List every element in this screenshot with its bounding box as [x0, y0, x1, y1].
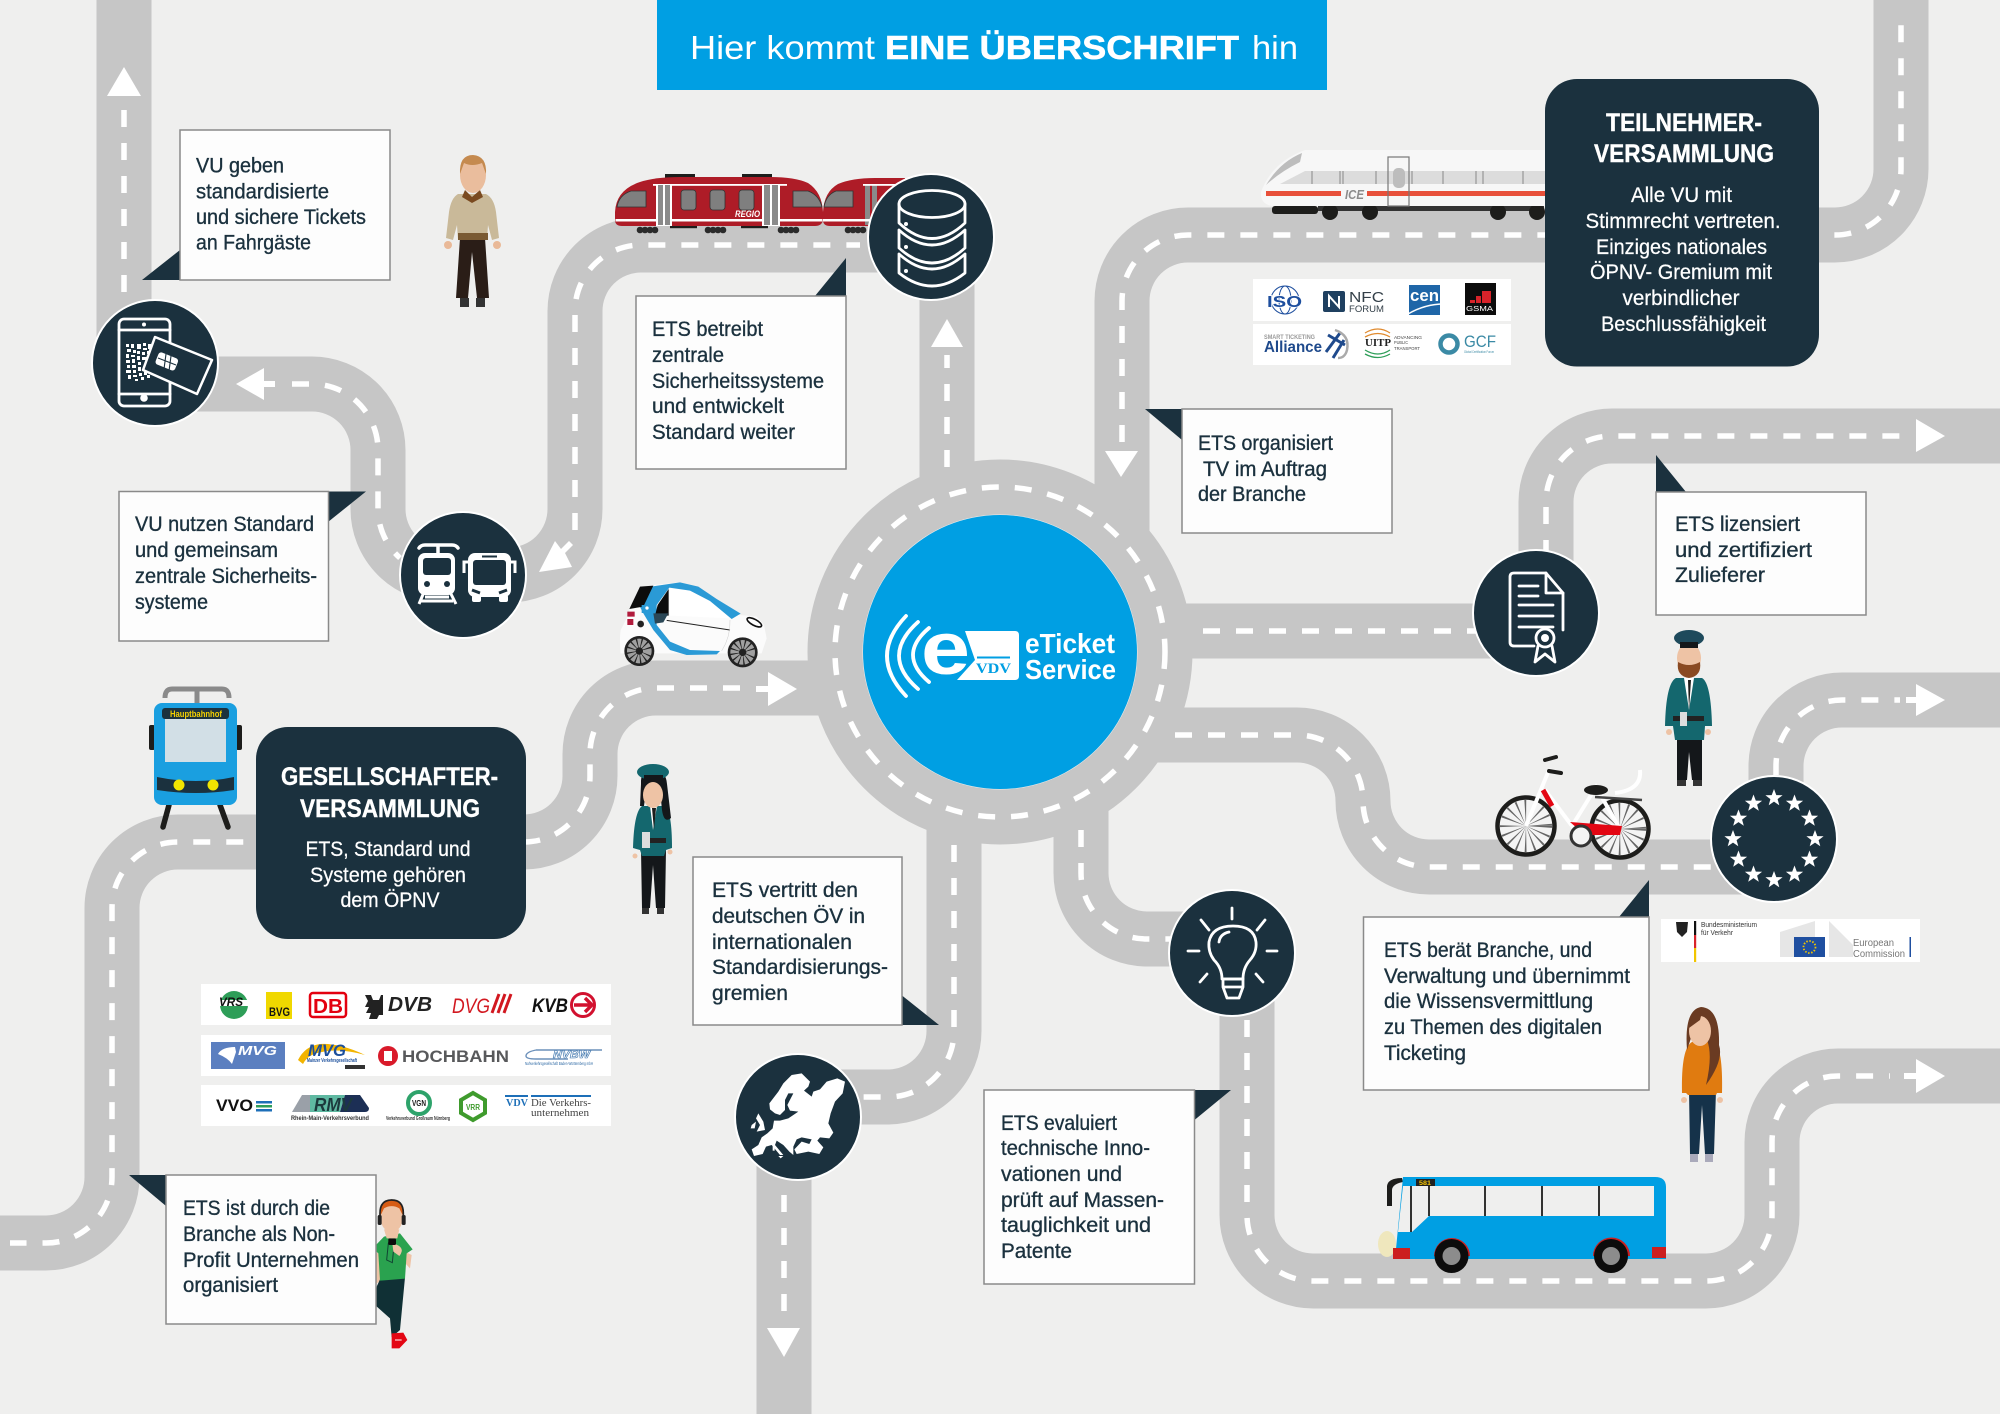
logo: MVG Mainz: Mainzer Verkehrsgesellschaft [307, 1058, 357, 1064]
person: man in beige jacket [444, 155, 501, 307]
callout: VU nutzen Standard: VU nutzen Standard [135, 513, 314, 536]
logo: NFC Forum: NFC [1349, 289, 1384, 306]
logo: UITP: UITP [1365, 338, 1391, 349]
central logo: eTicket Service: VDV [976, 661, 1011, 677]
logo: UITP [1365, 329, 1423, 358]
icon: phone with QR code and chip card [92, 300, 218, 426]
logo: MVG blue [211, 1042, 285, 1069]
logo: GCF: GCF [1464, 332, 1496, 351]
logo: GCF: Global Certification Forum [1464, 350, 1494, 354]
logo: Smart Ticketing Alliance: SMART TICKETING [1264, 335, 1315, 341]
logo: UITP: TRANSPORT [1394, 346, 1420, 351]
title banner: hin [1252, 29, 1298, 66]
callout: ETS lizensiert: Zulieferer [1675, 564, 1765, 587]
logo: Smart Ticketing Alliance: Alliance [1264, 339, 1322, 356]
icon: light bulb [1169, 890, 1295, 1016]
logo: MVG Mainz [298, 1041, 365, 1069]
logo: Hochbahn: HOCHBAHN [402, 1047, 509, 1066]
arrow: left towards phone icon [236, 368, 275, 400]
icon: EU stars [1711, 776, 1837, 902]
callout: ETS evaluiert: prüft auf Massen- [1001, 1189, 1164, 1212]
arrow: down-left towards transit icon [539, 541, 573, 572]
vehicle: ICE train: ICE [1345, 187, 1364, 202]
callout: VU geben Tickets [142, 130, 390, 280]
logo: NFC Forum [1323, 289, 1384, 315]
callout: ETS betreibt: und entwickelt [652, 395, 784, 418]
logo: VGN [386, 1092, 450, 1122]
logo: NVBW: Nahverkehrsgesellschaft Baden-Württemberg mbH [525, 1061, 593, 1066]
vehicle: red regional train [615, 174, 905, 233]
logos: ministry and European Commission: European [1853, 938, 1894, 949]
callout: ETS vertritt: internationalen [712, 931, 852, 954]
logo: UITP: PUBLIC [1394, 340, 1409, 345]
arrow: down, bottom road [767, 1328, 800, 1357]
vehicle: blue bus: 581 [1419, 1181, 1432, 1187]
callout: ETS evaluiert [984, 1090, 1231, 1284]
callout: ETS berät: Verwaltung und übernimmt [1384, 965, 1630, 988]
logo: VVO [216, 1096, 272, 1115]
callout: VU geben Tickets: VU geben [196, 154, 284, 178]
panel: Gesellschafterversammlung: Systeme gehören [310, 864, 466, 887]
panel: Teilnehmerversammlung: Einziges nationales [1596, 236, 1767, 259]
callout: ETS evaluiert: Patente [1001, 1240, 1072, 1263]
callout: ETS Non-Profit: organisiert [183, 1274, 278, 1297]
central logo: eTicket Service: Service [1025, 654, 1116, 685]
logo: VDV: VDV [506, 1098, 529, 1109]
arrow: right into roundabout [756, 672, 797, 706]
callout: VU nutzen Standard: und gemeinsam [135, 539, 278, 562]
title banner: Hier kommt [690, 29, 875, 66]
callout: ETS evaluiert: vationen und [1001, 1163, 1122, 1186]
logo: VRR [461, 1093, 485, 1120]
logo: DVG: DVG [452, 995, 490, 1018]
callout: VU geben Tickets: an Fahrgäste [196, 232, 311, 254]
icon: map of Europe [735, 1054, 861, 1180]
logo: NFC Forum: FORUM [1349, 304, 1384, 315]
logo: NVBW [525, 1049, 602, 1066]
callout: ETS berät: zu Themen des digitalen [1384, 1016, 1602, 1039]
person: male conductor [1665, 630, 1712, 786]
logo: RMV [291, 1095, 369, 1122]
callout: ETS lizensiert [1656, 455, 1866, 615]
callout: ETS berät: Ticketing [1384, 1042, 1466, 1065]
callout: ETS berät: die Wissensvermittlung [1384, 990, 1593, 1013]
arrow: up to database [931, 319, 963, 347]
callout: VU nutzen Standard: systeme [135, 591, 208, 614]
panel: Teilnehmerversammlung: Alle VU mit [1631, 184, 1732, 207]
callout: ETS betreibt: Sicherheitssysteme [652, 370, 824, 393]
panel: Gesellschafterversammlung: VERSAMMLUNG [300, 795, 480, 823]
callout: VU nutzen Standard: zentrale Sicherheits- [135, 565, 317, 588]
callout: ETS Non-Profit: ETS ist durch die [183, 1197, 330, 1220]
vehicle: ICE train [1261, 150, 1546, 220]
callout: ETS vertritt: ETS vertritt den [712, 879, 858, 902]
callout: ETS evaluiert: technische Inno- [1001, 1137, 1150, 1160]
callout: ETS organisiert: TV im Auftrag [1203, 458, 1327, 481]
callout: ETS betreibt: Standard weiter [652, 421, 795, 444]
vehicle: blue bus [1378, 1177, 1666, 1273]
panel: Teilnehmerversammlung: Stimmrecht vertreten. [1586, 210, 1780, 233]
icon: tram and bus [400, 512, 526, 638]
logo: MVG blue: MVG [238, 1043, 277, 1058]
arrow: right, middle right road [1906, 684, 1945, 716]
central logo: eTicket Service [863, 515, 1137, 789]
callout: VU geben Tickets: standardisierte [196, 180, 329, 204]
callout: ETS evaluiert: ETS evaluiert [1001, 1112, 1117, 1135]
logo: RMV: RMV [314, 1095, 354, 1115]
logo: BVG: BVG [269, 1005, 290, 1019]
title banner [657, 0, 1327, 90]
logo: VRS [219, 991, 248, 1019]
logos: ministry and European Commission: Bundesministerium [1701, 920, 1757, 929]
panel: Gesellschafterversammlung: dem ÖPNV [340, 889, 440, 912]
panel: Gesellschafterversammlung [256, 727, 526, 939]
callout: ETS betreibt [636, 258, 846, 469]
vehicle: car [620, 582, 767, 667]
callout: VU nutzen Standard [119, 492, 366, 641]
arrow: up, top left road [107, 67, 141, 96]
logo: VDV [505, 1095, 592, 1119]
logo: RMV: Rhein-Main-Verkehrsverbund [291, 1115, 369, 1122]
callout: ETS betreibt: ETS betreibt [652, 318, 763, 341]
callout: ETS lizensiert: ETS lizensiert [1675, 513, 1800, 536]
logo: NVBW: NVBW [553, 1049, 592, 1061]
callout: VU geben Tickets: und sichere Tickets [196, 206, 366, 229]
callout: ETS betreibt: zentrale [652, 344, 724, 367]
callout: ETS organisiert: der Branche [1198, 483, 1306, 506]
logo: GSMA [1465, 283, 1496, 315]
logo: MVG Mainz: MVG [308, 1041, 346, 1060]
arrow: right, lower right road [1904, 1059, 1945, 1093]
logos: ministry and European Commission: Commission [1853, 949, 1905, 960]
logos: standardisation bodies [1253, 279, 1511, 365]
callout: ETS Non-Profit: Profit Unternehmen [183, 1249, 359, 1272]
vehicle: blue tram [149, 689, 242, 827]
logo: ISO: ISO [1267, 294, 1302, 311]
logo: ISO [1267, 286, 1302, 314]
panel: Teilnehmerversammlung: ÖPNV- Gremium mit [1590, 261, 1772, 284]
logo: VGN: VGN [412, 1099, 426, 1108]
logo: DVB [365, 994, 432, 1019]
callout: ETS organisiert [1145, 409, 1392, 533]
logo: KVB [532, 994, 594, 1017]
logo: VDV: unternehmen [531, 1108, 590, 1119]
logo: VDV: Die Verkehrs- [531, 1098, 592, 1109]
logo: VRR: VRR [466, 1103, 480, 1112]
icon: database [868, 174, 994, 300]
logo: DVB: DVB [388, 994, 432, 1016]
vehicle: red regional train: REGIO [735, 209, 760, 219]
logo: VVO: VVO [216, 1096, 253, 1115]
logos: ministry and European Commission [1661, 919, 1920, 962]
logo: BVG [266, 992, 292, 1019]
logo: KVB: KVB [532, 996, 568, 1017]
arrow: right, upper right road [1916, 419, 1945, 452]
vehicle: blue tram: Hauptbahnhof [170, 709, 223, 719]
panel: Teilnehmerversammlung: Beschlussfähigkeit [1601, 313, 1766, 336]
callout: ETS vertritt [693, 857, 939, 1025]
callout: ETS vertritt: Standardisierungs- [712, 956, 888, 979]
vehicle: bicycle [1498, 757, 1648, 858]
central logo: eTicket Service: eTicket [1025, 628, 1115, 659]
callout: ETS vertritt: gremien [712, 982, 788, 1005]
callout: ETS Non-Profit: Branche als Non- [183, 1223, 335, 1246]
panel: Teilnehmerversammlung: TEILNEHMER- [1606, 109, 1762, 137]
panel: Teilnehmerversammlung: verbindlicher [1622, 287, 1740, 310]
person: girl with headphones [371, 1199, 413, 1348]
callout: ETS Non-Profit [129, 1175, 376, 1324]
logo: CEN [1408, 285, 1444, 315]
logo: VGN: Verkehrsverbund Großraum Nürnberg [386, 1116, 450, 1122]
icon: certificate [1473, 550, 1599, 676]
logo: DB: DB [313, 996, 343, 1018]
logo: GSMA: GSMA [1466, 306, 1493, 313]
callout: ETS lizensiert: und zertifiziert [1675, 539, 1812, 562]
logo: GCF [1440, 332, 1496, 354]
logo: VRS: VRS [219, 995, 243, 1009]
callout: ETS evaluiert: tauglichkeit und [1001, 1214, 1151, 1237]
logos: shareholders [201, 984, 611, 1126]
central logo: eTicket Service: e [921, 607, 970, 690]
person: woman in orange jacket [1681, 1007, 1723, 1162]
callout: ETS organisiert: ETS organisiert [1198, 432, 1333, 455]
callout: ETS berät: ETS berät Branche, und [1384, 939, 1592, 962]
logos: ministry and European Commission: für Verkehr [1701, 928, 1733, 937]
callout: ETS vertritt: deutschen ÖV in [712, 905, 865, 928]
arrow: down into roundabout [1105, 451, 1138, 477]
logo: CEN: cen [1410, 286, 1439, 305]
panel: Gesellschafterversammlung: ETS, Standard und [306, 838, 470, 861]
panel: Teilnehmerversammlung [1545, 79, 1819, 366]
person: female conductor [632, 764, 672, 914]
callout: ETS berät [1364, 880, 1649, 1090]
panel: Teilnehmerversammlung: VERSAMMLUNG [1594, 140, 1774, 168]
panel: Gesellschafterversammlung: GESELLSCHAFTER- [281, 763, 498, 791]
logo: Smart Ticketing Alliance [1264, 330, 1348, 358]
logo: UITP: ADVANCING [1394, 335, 1423, 340]
title banner: EINE ÜBERSCHRIFT [885, 29, 1239, 66]
